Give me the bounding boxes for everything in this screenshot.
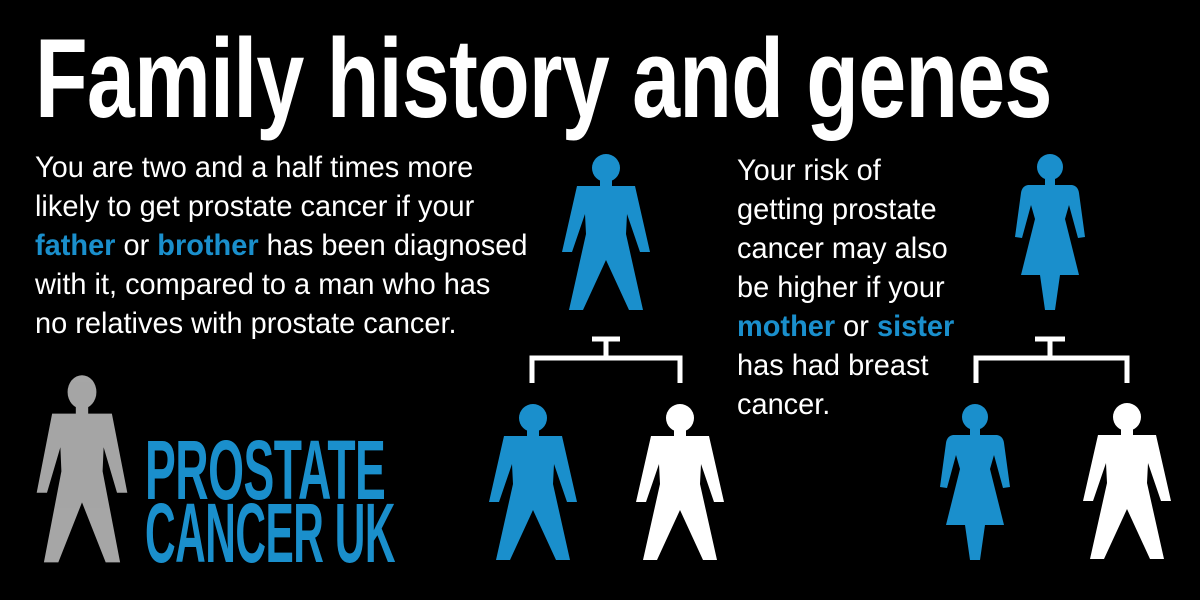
- logo text: [145, 423, 396, 580]
- icon: mother: [1015, 154, 1085, 310]
- text block: left: father or brother has been diagnosed: [35, 229, 527, 262]
- text block: right: be higher if your: [737, 271, 945, 304]
- logo text: CANCER UK: [145, 486, 395, 580]
- bracket connector right: [976, 339, 1127, 383]
- icon: sister: [940, 404, 1010, 560]
- text block: right: Your risk of: [737, 154, 881, 187]
- icon: father: [562, 154, 650, 310]
- logo text: PROSTATE: [145, 423, 385, 517]
- text block: left: You are two and a half times more: [35, 151, 473, 184]
- right tree: [940, 154, 1171, 560]
- text block: right: [737, 154, 954, 421]
- text block: right: mother or sister: [737, 310, 954, 343]
- icon: you (white man): [636, 404, 724, 560]
- text block: left: [35, 151, 527, 340]
- icon: you (white man) right: [1083, 403, 1171, 559]
- text block: right: has had breast: [737, 349, 929, 382]
- text block: left: with it, compared to a man who has: [35, 268, 490, 301]
- icon: brother: [489, 404, 577, 560]
- text block: left: no relatives with prostate cancer.: [35, 307, 457, 340]
- text block: left: likely to get prostate cancer if your: [35, 190, 474, 223]
- text block: right: cancer.: [737, 388, 830, 421]
- logo figure: [37, 375, 127, 562]
- text block: right: cancer may also: [737, 232, 948, 265]
- text block: right: getting prostate: [737, 193, 937, 226]
- left tree: [489, 154, 724, 560]
- title: Family history and genes: [35, 16, 1052, 141]
- bracket connector: [532, 339, 680, 383]
